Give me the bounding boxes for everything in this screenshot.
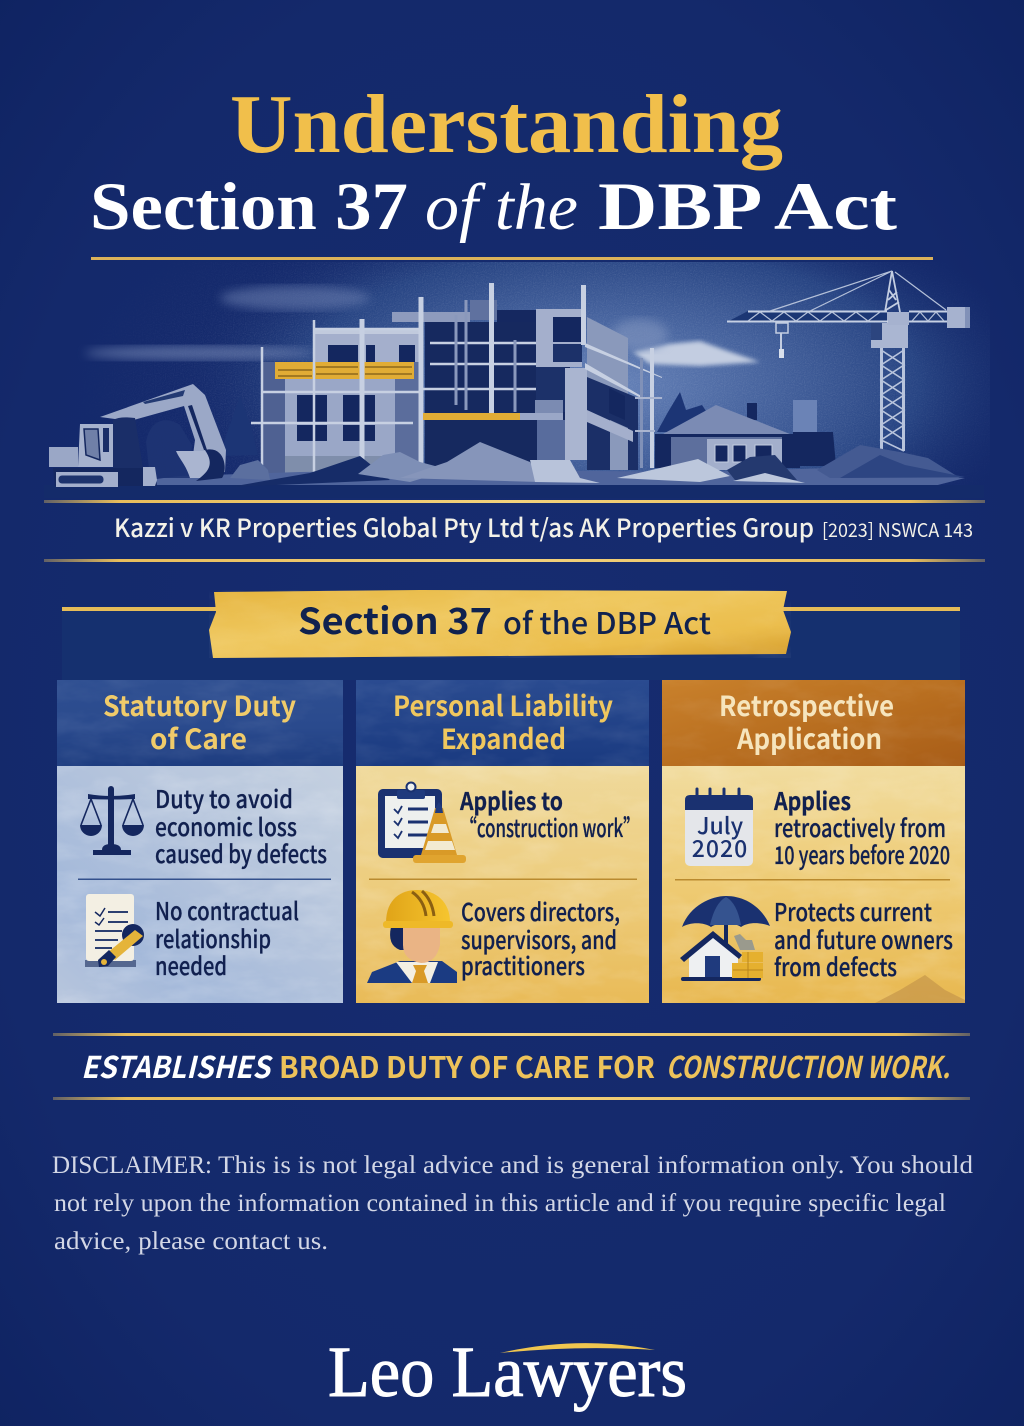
conclusion text bbox=[81, 1043, 950, 1087]
title bbox=[90, 78, 897, 244]
card heading bbox=[719, 685, 894, 758]
back structure bbox=[392, 312, 470, 322]
text: no contractual relationship: No contractual bbox=[155, 893, 299, 928]
card heading: Personal Liability bbox=[393, 685, 613, 725]
icon: house under umbrella with coins bbox=[680, 896, 770, 981]
icon: contract with pen bbox=[85, 894, 144, 967]
text: covers directors: practitioners bbox=[461, 948, 585, 983]
text: applies retroactively: 10 years before 2020 bbox=[774, 837, 950, 872]
icon: calendar: July bbox=[697, 807, 744, 841]
text: duty to avoid bbox=[155, 781, 327, 871]
section 37 panel bbox=[62, 590, 960, 680]
text: applies retroactively: Applies bbox=[773, 783, 851, 818]
distant buildings bbox=[793, 400, 817, 432]
conclusion text: CONSTRUCTION WORK. bbox=[666, 1043, 950, 1087]
card body bbox=[57, 766, 343, 1003]
building left bbox=[251, 297, 421, 473]
title line 2: of the bbox=[425, 171, 578, 244]
disclaimer: DISCLAIMER: bbox=[52, 1152, 212, 1179]
conclusion banner bbox=[53, 1033, 970, 1100]
text: applies to construction work: Applies to bbox=[459, 783, 563, 818]
text: protects owners bbox=[774, 894, 953, 984]
text: applies to construction work: “construction work” bbox=[460, 810, 640, 845]
building centre bbox=[420, 283, 578, 420]
logo wordmark: Leo Lawyers bbox=[328, 1332, 687, 1412]
card heading: Application bbox=[736, 718, 882, 758]
title line 2: Section 37 bbox=[90, 168, 408, 244]
title rule bbox=[91, 257, 933, 260]
card heading: Retrospective bbox=[719, 685, 894, 725]
house bbox=[655, 405, 836, 470]
disclaimer bbox=[52, 1152, 974, 1255]
card: personal liability expanded bbox=[356, 680, 649, 1003]
ground bbox=[90, 468, 965, 487]
conclusion text: BROAD DUTY OF CARE FOR bbox=[279, 1043, 655, 1087]
title line 2: DBP Act bbox=[598, 168, 897, 244]
rubble piles bbox=[230, 442, 965, 487]
card: retrospective application bbox=[662, 680, 965, 1003]
text: protects owners: Protects current bbox=[774, 894, 932, 929]
text: applies to construction work bbox=[459, 783, 640, 845]
disclaimer: This is is not legal advice and is general information only. You should bbox=[218, 1152, 974, 1179]
panel gold rule bbox=[62, 607, 960, 611]
card heading: Statutory Duty bbox=[103, 685, 296, 725]
text: applies retroactively bbox=[773, 783, 950, 872]
text: applies retroactively: retroactively from bbox=[774, 810, 946, 845]
panel background bbox=[62, 608, 960, 680]
text: no contractual relationship bbox=[155, 893, 299, 983]
disclaimer: not rely upon the information contained in this article and if you require specific legal bbox=[54, 1190, 946, 1217]
text: duty to avoid: economic loss bbox=[155, 809, 297, 844]
text: no contractual relationship: needed bbox=[155, 948, 227, 983]
text: duty to avoid: caused by defects bbox=[155, 836, 327, 871]
text: covers directors bbox=[461, 894, 620, 983]
illustration: construction site bbox=[30, 262, 990, 498]
trees bbox=[220, 392, 712, 456]
logo swoosh bbox=[500, 1343, 655, 1353]
case citation band bbox=[44, 500, 985, 562]
case citation: Kazzi v KR Properties Global Pty Ltd t/as AK Properties Group bbox=[114, 509, 814, 545]
conclusion rules bbox=[53, 1033, 970, 1036]
text: covers directors: Covers directors, bbox=[461, 894, 620, 929]
card heading bbox=[393, 685, 613, 758]
card heading: Expanded bbox=[441, 718, 566, 758]
icon: clipboard and cone bbox=[378, 782, 466, 863]
crane bbox=[727, 271, 970, 451]
building right bbox=[535, 285, 662, 470]
title line 1: Understanding bbox=[230, 78, 783, 171]
text: protects owners: and future owners bbox=[774, 922, 953, 957]
banner: Section 37 bbox=[298, 593, 492, 645]
card heading bbox=[103, 685, 296, 758]
card header bbox=[356, 680, 649, 766]
excavator bbox=[49, 384, 226, 487]
icon: worker with hard hat bbox=[367, 890, 457, 983]
banner: of the DBP Act bbox=[503, 599, 711, 643]
clouds bbox=[85, 286, 760, 366]
icon: calendar bbox=[685, 789, 753, 866]
title line 2 bbox=[90, 168, 897, 244]
card body bbox=[662, 766, 965, 1003]
card heading: of Care bbox=[150, 718, 247, 758]
case citation: [2023] NSWCA 143 bbox=[822, 516, 973, 543]
conclusion text: ESTABLISHES bbox=[81, 1043, 273, 1087]
case band rules bbox=[44, 500, 985, 503]
text: covers directors: supervisors, and bbox=[461, 922, 617, 957]
banner bbox=[209, 590, 791, 658]
icon: calendar: 2020 bbox=[692, 830, 748, 864]
disclaimer: advice, please contact us. bbox=[54, 1228, 328, 1255]
card: statutory duty of care bbox=[57, 680, 343, 1003]
logo: Leo Lawyers bbox=[328, 1332, 687, 1412]
icon: scales bbox=[80, 786, 144, 855]
card header bbox=[57, 680, 343, 766]
sky glow bbox=[30, 262, 990, 497]
card header bbox=[662, 680, 965, 766]
text: no contractual relationship: relationship bbox=[155, 921, 271, 956]
text: protects owners: from defects bbox=[774, 949, 897, 984]
card body bbox=[356, 766, 649, 1003]
sand mound bbox=[875, 975, 965, 1003]
text: duty to avoid: Duty to avoid bbox=[155, 781, 293, 816]
